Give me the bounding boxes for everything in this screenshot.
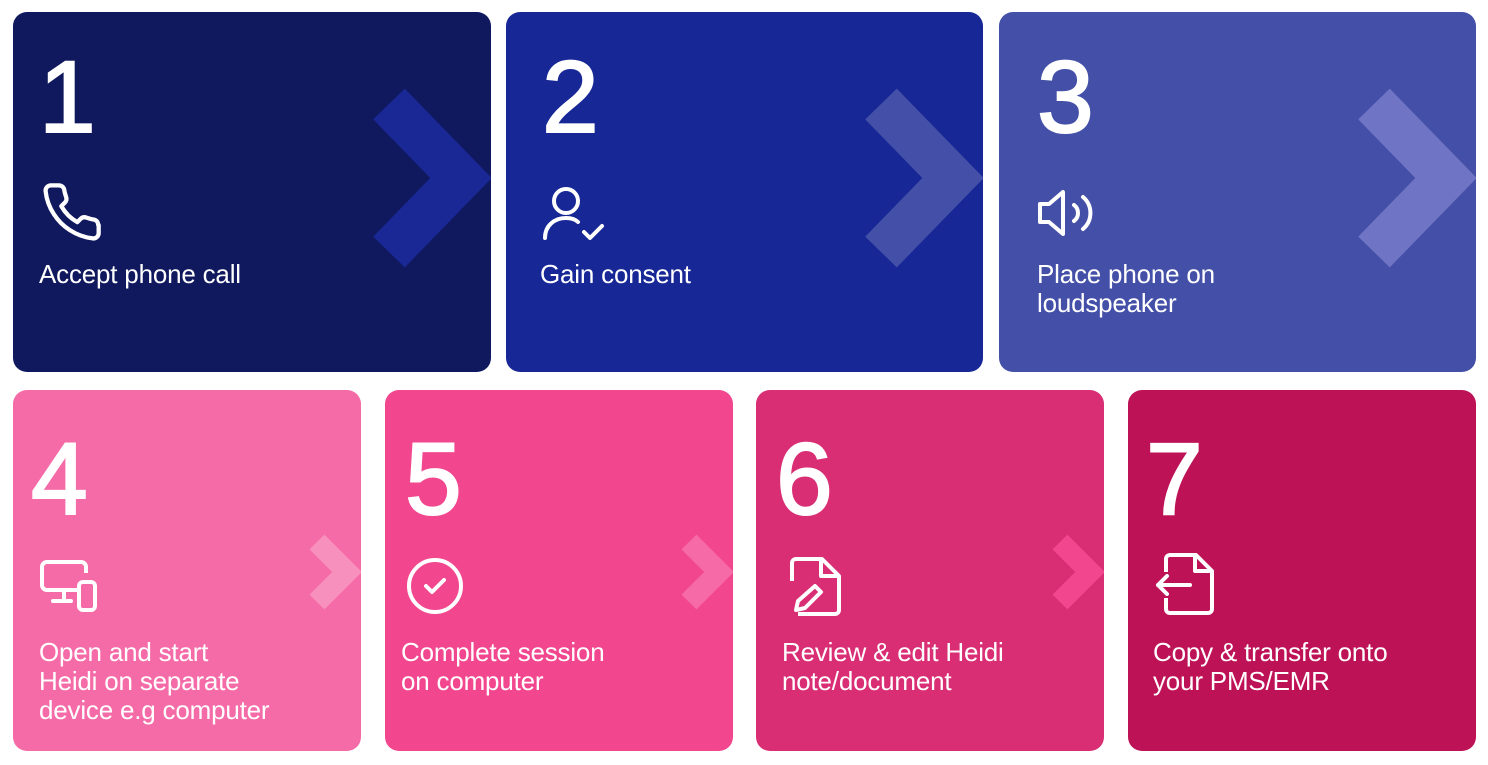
icon: devices	[40, 560, 97, 612]
label: loudspeaker	[1037, 288, 1176, 318]
label: note/document	[782, 666, 951, 696]
panel: step 6	[756, 390, 1104, 751]
icon: check circle	[407, 558, 463, 614]
label: device e.g computer	[39, 695, 269, 725]
number 4: 4	[31, 422, 88, 536]
panel: step 3	[999, 12, 1476, 372]
icon: user check	[543, 187, 604, 240]
label: Place phone on	[1037, 259, 1215, 289]
panel: step 2	[506, 12, 983, 372]
label	[1153, 637, 1387, 696]
panel: step 7	[1128, 390, 1476, 751]
label	[39, 637, 270, 725]
number 6: 6	[776, 422, 833, 536]
label: Open and start	[39, 637, 208, 667]
label: Complete session	[401, 637, 604, 667]
icon: document edit	[790, 557, 841, 616]
number 7: 7	[1146, 422, 1203, 536]
number 2: 2	[542, 40, 599, 154]
label	[782, 637, 1004, 696]
label	[1037, 259, 1215, 318]
panel: step 4	[13, 390, 361, 751]
label	[401, 637, 604, 696]
label: Accept phone call	[39, 259, 241, 289]
number 3: 3	[1037, 40, 1094, 154]
number 1: 1	[39, 40, 96, 154]
panel: step 5	[385, 390, 733, 751]
label: on computer	[401, 666, 543, 696]
label: Gain consent	[540, 259, 691, 289]
icon: phone	[43, 183, 101, 241]
label: your PMS/EMR	[1153, 666, 1330, 696]
icon: file transfer	[1156, 553, 1214, 615]
label: Review & edit Heidi	[782, 637, 1004, 667]
panel: step 1	[13, 12, 491, 372]
label: Heidi on separate	[39, 666, 239, 696]
icon: speaker	[1038, 190, 1092, 236]
label: Copy & transfer onto	[1153, 637, 1387, 667]
number 5: 5	[405, 422, 462, 536]
